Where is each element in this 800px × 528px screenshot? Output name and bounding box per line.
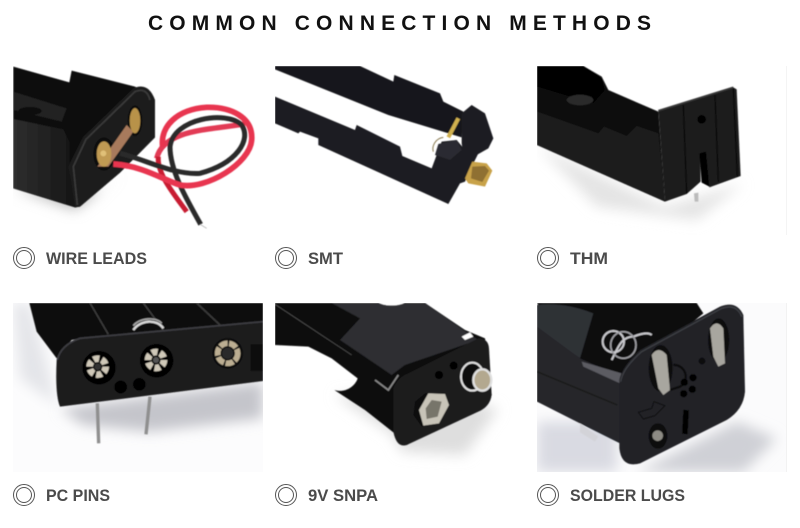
label: wire leads: WIRE LEADS [46, 250, 147, 268]
divider line of photo edge [786, 66, 787, 235]
icon: SMT radio ring [276, 248, 296, 268]
panel: wire leads [13, 67, 252, 268]
icon: 9V snap radio ring [276, 484, 296, 506]
panel: 9V snap [275, 303, 498, 506]
panel: solder lugs [537, 303, 787, 506]
photo: solder lugs holder [537, 303, 787, 472]
icon: THM radio ring [538, 248, 558, 268]
label: THM: THM [570, 250, 608, 268]
icon: solder lugs radio ring [538, 484, 558, 506]
photo: 9V snap holder [275, 303, 498, 455]
label: PC pins: PC PINS [46, 487, 110, 505]
label: SMT: SMT [308, 250, 343, 268]
label: 9V snap: 9V SNPA [308, 487, 378, 505]
photo: wire leads holder [13, 67, 252, 228]
panel: THM [537, 66, 787, 268]
icon: wire leads radio ring [14, 248, 34, 268]
photo: THM holder [537, 66, 787, 235]
photo: SMT holder [275, 66, 493, 204]
photo: PC pins holder [13, 303, 263, 444]
title: COMMON CONNECTION METHODS [148, 12, 651, 35]
icon: PC pins radio ring [14, 484, 34, 506]
label: solder lugs: SOLDER LUGS [570, 487, 685, 505]
panel: SMT [275, 66, 493, 268]
panel: PC pins [13, 303, 263, 506]
